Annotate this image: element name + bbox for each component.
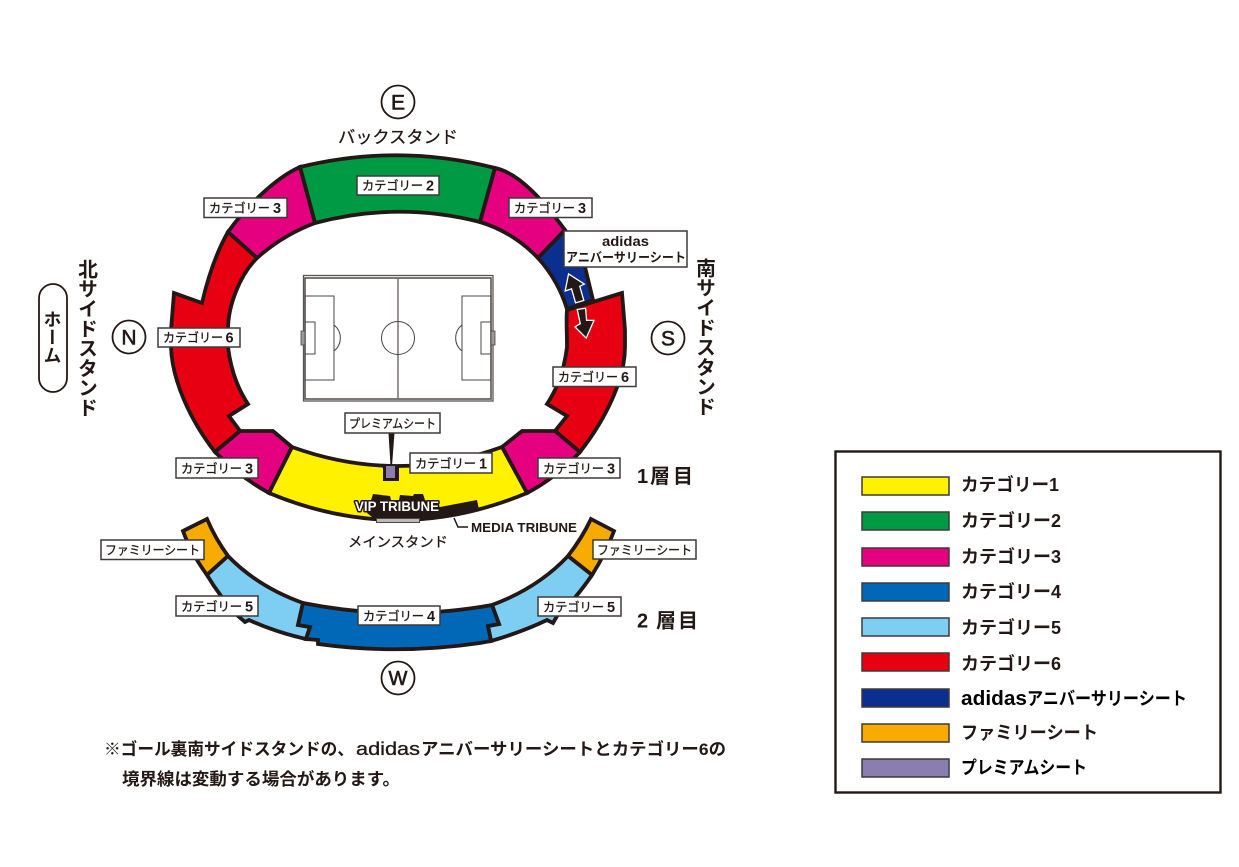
label: family right: ファミリーシート — [597, 544, 692, 558]
legend panel — [836, 452, 1220, 792]
legend: category 1: カテゴリー1 — [961, 474, 1059, 495]
label: category 1: 1 — [479, 456, 487, 472]
label: family left — [101, 540, 204, 560]
legend: premium seat — [862, 758, 1087, 778]
legend: family seat: ファミリーシート — [961, 723, 1098, 743]
seat section: category 2 — [300, 155, 495, 223]
label: category 2: カテゴリー — [362, 178, 423, 193]
label: category 3 north-east left — [204, 198, 287, 218]
label: category 3 north-east right: カテゴリー — [514, 200, 575, 216]
label: category 3 lower left — [176, 458, 258, 478]
label: category 4: カテゴリー — [363, 608, 424, 624]
legend: adidas anniversary — [862, 688, 1187, 710]
compass W: W — [389, 668, 408, 690]
compass S: S — [661, 328, 675, 350]
label: category 3 lower right: カテゴリー — [543, 461, 604, 476]
tier 2 heading: 目 — [678, 610, 698, 632]
seat section: category 5 right — [488, 556, 592, 641]
legend: category 2: カテゴリー2 — [961, 510, 1061, 531]
compass W — [382, 662, 414, 694]
legend: family seat — [862, 723, 1098, 743]
premium seat block — [383, 433, 399, 481]
stadium tier 2 — [183, 519, 614, 649]
legend: category 6 — [862, 653, 1061, 674]
seat section: category 6 south — [547, 293, 625, 452]
label: category 6 north — [158, 328, 240, 347]
seat section: category 5 left — [207, 556, 310, 639]
tier 1 heading: 目 — [673, 466, 693, 488]
media tribune callout — [454, 518, 577, 535]
seat section: category 3 lower right — [502, 431, 580, 493]
label: category 3 lower right — [538, 458, 620, 478]
seat section: category 1 — [269, 447, 527, 520]
label: family left: ファミリーシート — [105, 544, 200, 558]
south side stand heading: 南サイドスタンド — [692, 258, 714, 416]
label: category 3 north-east left: カテゴリー — [209, 200, 270, 216]
arrow: boundary up — [566, 275, 583, 302]
tier 2 heading: 2 — [637, 610, 648, 632]
label: category 2: 2 — [426, 178, 434, 194]
home badge: ホーム — [42, 310, 62, 364]
label: category 6 south: カテゴリー — [558, 370, 618, 384]
label: adidas anniversary: adidas — [602, 233, 649, 249]
compass E and back stand heading — [338, 86, 458, 147]
seat section: family right — [568, 519, 614, 575]
label: premium seat — [345, 413, 440, 433]
footnote: アニバーサリーシートとカテゴリー6の — [421, 739, 726, 759]
home badge — [39, 284, 67, 392]
label: category 5 left: カテゴリー — [181, 599, 242, 614]
compass E and back stand heading: E — [391, 92, 405, 114]
legend: category 4: カテゴリー4 — [961, 581, 1061, 602]
label: category 5 left — [176, 596, 258, 616]
legend: adidas anniversary: アニバーサリーシート — [1027, 689, 1187, 709]
compass N — [112, 320, 146, 354]
seat section: category 3 lower left — [215, 431, 292, 493]
pitch — [301, 276, 495, 401]
label: adidas anniversary: アニバーサリーシート — [566, 250, 686, 265]
compass S — [652, 322, 684, 354]
label: category 6 north: カテゴリー — [163, 330, 223, 345]
seat section: adidas anniversary — [538, 230, 593, 309]
label: adidas anniversary — [564, 231, 687, 267]
label: category 3 lower left: 3 — [245, 462, 253, 478]
label: category 5 left: 5 — [245, 600, 253, 616]
vip tribune text: VIP TRIBUNE — [355, 499, 439, 514]
legend: premium seat: プレミアムシート — [961, 758, 1087, 778]
legend: category 6: カテゴリー6 — [961, 653, 1061, 674]
legend: category 1 — [862, 474, 1059, 495]
stadium tier 1 — [171, 155, 625, 522]
footnote: ※ゴール裏南サイドスタンドの、 — [104, 739, 354, 759]
legend: category 5 — [862, 617, 1061, 638]
label: category 3 north-east right — [509, 198, 592, 218]
label: category 5 right: カテゴリー — [543, 600, 604, 614]
press bar — [376, 518, 420, 522]
seat section: category 3 south-east — [480, 168, 565, 258]
compass N: N — [121, 326, 137, 350]
label: category 1 — [410, 453, 492, 473]
label: category 5 right — [538, 597, 621, 616]
footnote: 境界線は変動する場合があります。 — [122, 769, 400, 789]
tier 1 heading: 1 — [637, 466, 648, 488]
tier 2 heading: 層 — [656, 610, 676, 632]
label: category 3 lower left: カテゴリー — [181, 461, 242, 476]
label: category 2 — [357, 176, 439, 195]
label: category 6 north: 6 — [226, 330, 234, 346]
north side stand heading: 北サイドスタンド — [74, 259, 97, 417]
seat section: category 6 north — [171, 232, 257, 452]
label: category 4 — [358, 606, 440, 625]
label: premium seat: プレミアムシート — [349, 417, 436, 431]
compass E and back stand heading: バックスタンド — [338, 128, 458, 147]
arrow: boundary down — [576, 309, 593, 337]
tier 1 heading: 層 — [650, 466, 670, 488]
footnote: adidas — [356, 739, 420, 759]
vip and media tribune block — [367, 494, 479, 520]
legend: category 3: カテゴリー3 — [961, 546, 1061, 567]
label: category 6 south — [553, 367, 636, 386]
label: category 1: カテゴリー — [415, 456, 476, 471]
legend: category 2 — [862, 510, 1061, 531]
label: category 5 right: 5 — [607, 600, 615, 616]
label: category 4: 4 — [427, 609, 435, 625]
main stand heading: メインスタンド — [348, 534, 448, 550]
legend: category 3 — [862, 546, 1061, 567]
seat section: category 4 — [298, 603, 499, 649]
legend: category 5: カテゴリー5 — [961, 617, 1061, 638]
seat section: family left — [183, 519, 228, 575]
label: category 3 north-east right: 3 — [578, 201, 586, 217]
seat section: category 3 north-east — [228, 167, 315, 258]
label: category 3 north-east left: 3 — [273, 201, 281, 217]
label: category 6 south: 6 — [621, 370, 629, 386]
legend: adidas anniversary: adidas — [961, 688, 1027, 710]
media tribune callout: MEDIA TRIBUNE — [471, 521, 577, 535]
legend: category 4 — [862, 581, 1061, 602]
footnote — [104, 739, 726, 789]
label: category 3 lower right: 3 — [607, 462, 615, 478]
